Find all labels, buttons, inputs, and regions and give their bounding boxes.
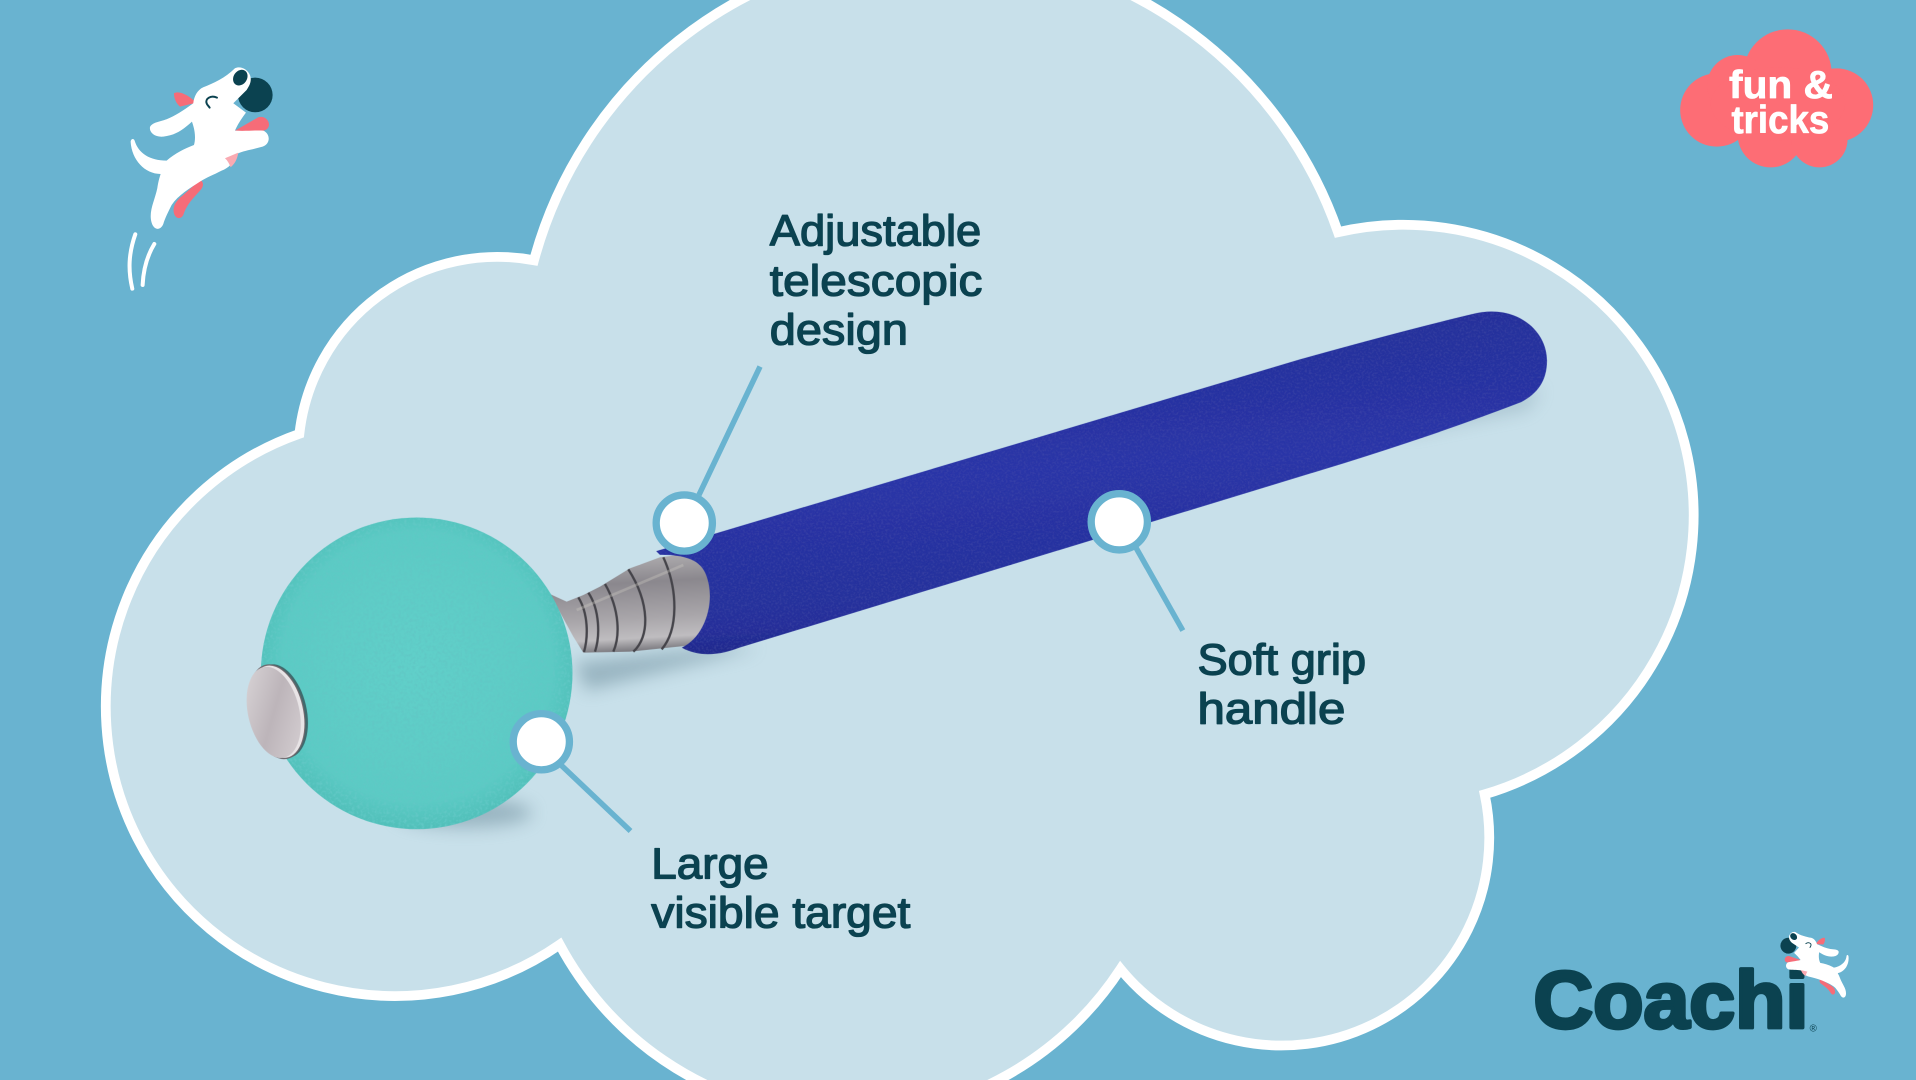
registered mark: ® [1810, 1023, 1818, 1034]
callout: telescopic [656, 207, 982, 551]
icon: small dog [1778, 922, 1856, 1007]
label: adjustable telescopic design: telescopic [770, 257, 982, 306]
marker [656, 495, 712, 551]
marker [513, 714, 569, 770]
badge text: fun & [1729, 64, 1833, 107]
label: soft grip handle: handle [1197, 684, 1345, 733]
icon: jumping dog [130, 67, 273, 289]
logo: Coachi [1534, 922, 1856, 1046]
label: adjustable telescopic design: Adjustable [770, 207, 981, 256]
icon: pink cloud [1680, 29, 1873, 167]
label: soft grip handle: Soft grip [1197, 636, 1366, 685]
marker [1091, 494, 1147, 550]
label: large visible target: Large [651, 840, 769, 889]
leader line [1135, 546, 1183, 631]
badge text: tricks [1731, 99, 1829, 142]
leader line [560, 764, 631, 831]
handle [656, 312, 1547, 654]
label: large visible target: visible target [651, 888, 910, 937]
logo wordmark: Coachi [1534, 956, 1808, 1046]
badge: fun and tricks [1680, 29, 1873, 167]
product: telescopic target stick [238, 312, 1547, 829]
callout: grip [1091, 494, 1366, 733]
shadows [397, 389, 1542, 827]
leader line [699, 367, 760, 495]
label: adjustable telescopic design: design [770, 306, 908, 355]
ball [261, 518, 572, 829]
magnet button [238, 659, 317, 765]
callout: target [513, 714, 910, 937]
telescopic rod [550, 553, 727, 653]
